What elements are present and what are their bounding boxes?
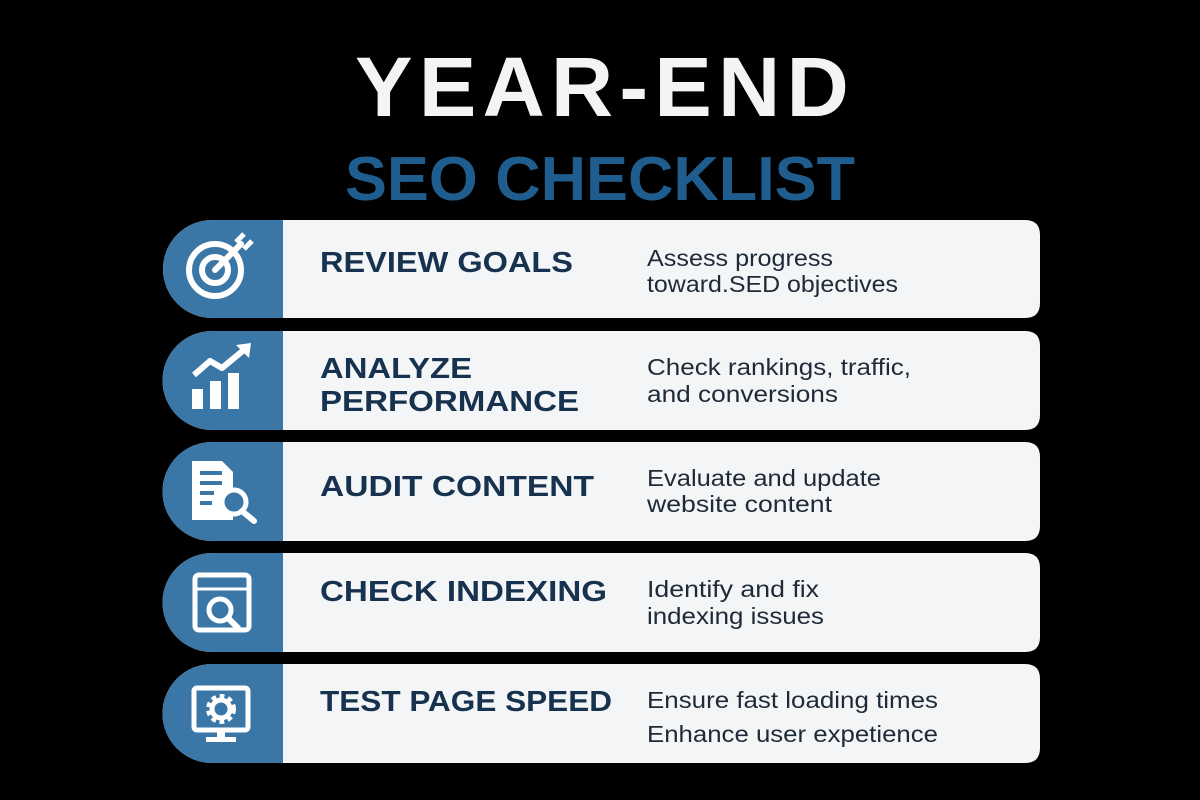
icon: document search (192, 461, 254, 521)
row: analyze performance (162, 331, 1040, 430)
description: Check rankings, traffic, (647, 354, 911, 380)
row: audit content (162, 442, 1040, 541)
title: YEAR-END (355, 40, 855, 134)
description: Identify and fix (647, 576, 820, 602)
icon: chart (192, 343, 251, 409)
row: analyze performance: PERFORMANCE (320, 386, 579, 418)
subtitle: SEO CHECKLIST (345, 145, 855, 214)
row: check indexing: indexing issues (647, 603, 824, 629)
description: Assess progress (647, 245, 833, 271)
heading: ANALYZE (320, 353, 472, 385)
icon: browser search (195, 575, 249, 630)
row: check indexing (162, 553, 1040, 652)
heading: TEST PAGE SPEED (320, 686, 612, 718)
row: review goals (163, 220, 1040, 318)
row: review goals: toward.SED objectives (647, 271, 898, 297)
heading: AUDIT CONTENT (320, 471, 594, 503)
heading: REVIEW GOALS (320, 247, 573, 279)
icon: monitor gear (194, 688, 248, 742)
description: Ensure fast loading times (647, 687, 938, 713)
description: Evaluate and update (647, 465, 881, 491)
row: test page speed: Enhance user expetience (647, 721, 938, 747)
heading: CHECK INDEXING (320, 576, 607, 608)
icon: target (189, 234, 252, 296)
row: analyze performance: and conversions (647, 381, 838, 407)
row: test page speed (162, 664, 1040, 763)
row: audit content: website content (646, 491, 833, 517)
